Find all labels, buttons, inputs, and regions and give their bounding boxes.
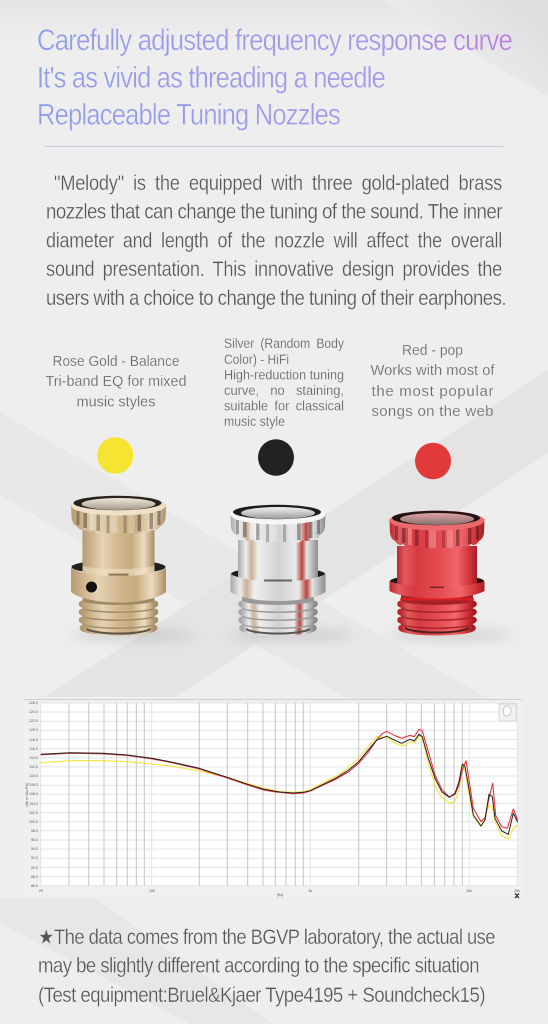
chart x axis labels: 20k: [514, 889, 520, 893]
chart y axis labels: 98.0: [31, 829, 38, 833]
silver description: Color) - HiFi: [224, 352, 289, 367]
rose gold description: Tri-band EQ for mixed: [46, 373, 186, 390]
silver description: [224, 336, 344, 429]
chart x axis labels: [Hz]: [277, 893, 283, 897]
red description: [370, 342, 495, 420]
chart y axis labels: 102.0: [29, 811, 38, 815]
chart y axis labels: 116.0: [29, 747, 38, 751]
chart x axis labels: 20: [39, 889, 43, 893]
chart y axis labels: 90.0: [31, 866, 38, 870]
silver description: music style: [224, 414, 285, 429]
chart y axis labels: 114.0: [29, 756, 38, 760]
red nozzle: [389, 510, 513, 639]
description paragraph: [46, 172, 506, 310]
red description: Red - pop: [402, 342, 463, 359]
silver description: Silver (Random Body: [224, 336, 344, 351]
chart y axis labels: 122.0: [29, 719, 38, 723]
yellow curve: [41, 736, 518, 839]
chart y axis labels: 124.0: [29, 710, 38, 714]
chart y axis labels: 118.0: [29, 738, 38, 742]
silver description: High-reduction tuning: [224, 368, 344, 382]
footnote: may be slightly different according to the specific situation: [38, 954, 479, 978]
red description: Works with most of: [370, 362, 495, 379]
description paragraph: nozzles that can change the tuning of the sound. The inner: [46, 200, 503, 224]
chart y axis labels: [dB re 20u Pa]: [25, 784, 29, 806]
chart y axis labels: [25, 701, 38, 888]
silver description: curve, no staining,: [224, 383, 344, 398]
colour dot: black: [258, 439, 294, 476]
rose gold nozzle: [70, 496, 194, 639]
chart y axis labels: 92.0: [31, 856, 38, 860]
colour dot: red: [415, 443, 451, 479]
red curve: [41, 729, 518, 828]
red description: songs on the web: [372, 403, 494, 420]
chart x axis labels: 10k: [466, 889, 472, 893]
silver description: suitable for classical: [224, 398, 344, 414]
chart y axis labels: 106.0: [29, 792, 38, 796]
title: It's as vivid as threading a needle: [37, 62, 385, 94]
chart y axis labels: 88.0: [31, 875, 38, 879]
chart x axis labels: 100: [149, 889, 155, 893]
chart corner logo: [499, 704, 516, 721]
rose gold description: music styles: [76, 394, 156, 410]
chart y axis labels: 112.0: [29, 765, 38, 769]
chart y axis labels: 86.0: [31, 884, 38, 888]
title: [37, 24, 512, 132]
colour dot: yellow: [97, 437, 133, 474]
title: Replaceable Tuning Nozzles: [37, 98, 340, 132]
red description: the most popular: [372, 383, 494, 400]
chart y axis labels: 100.0: [29, 820, 38, 824]
rose gold description: Rose Gold - Balance: [52, 353, 180, 370]
chart y axis labels: 108.0: [29, 783, 38, 787]
chart x axis labels: [39, 889, 520, 897]
frequency response chart: [24, 699, 522, 898]
footnote: (Test equipment:Bruel&Kjaer Type4195 + Soundcheck15): [38, 984, 485, 1007]
chart y axis labels: 104.0: [29, 802, 38, 806]
chart y axis labels: 94.0: [31, 847, 38, 851]
footnote: ★The data comes from the BGVP laboratory, the actual use: [38, 926, 495, 949]
silver nozzle: [230, 504, 354, 639]
chart y axis labels: 96.0: [31, 838, 38, 842]
chart x axis labels: 1k: [308, 889, 312, 893]
chart y axis labels: 120.0: [29, 728, 38, 732]
chart y axis labels: 110.0: [29, 774, 38, 778]
chart y axis labels: 126.0: [29, 701, 38, 705]
chart corner mark: [515, 894, 519, 898]
rose gold description: [46, 353, 186, 410]
footnote: [38, 926, 495, 1007]
black curve: [41, 734, 518, 834]
